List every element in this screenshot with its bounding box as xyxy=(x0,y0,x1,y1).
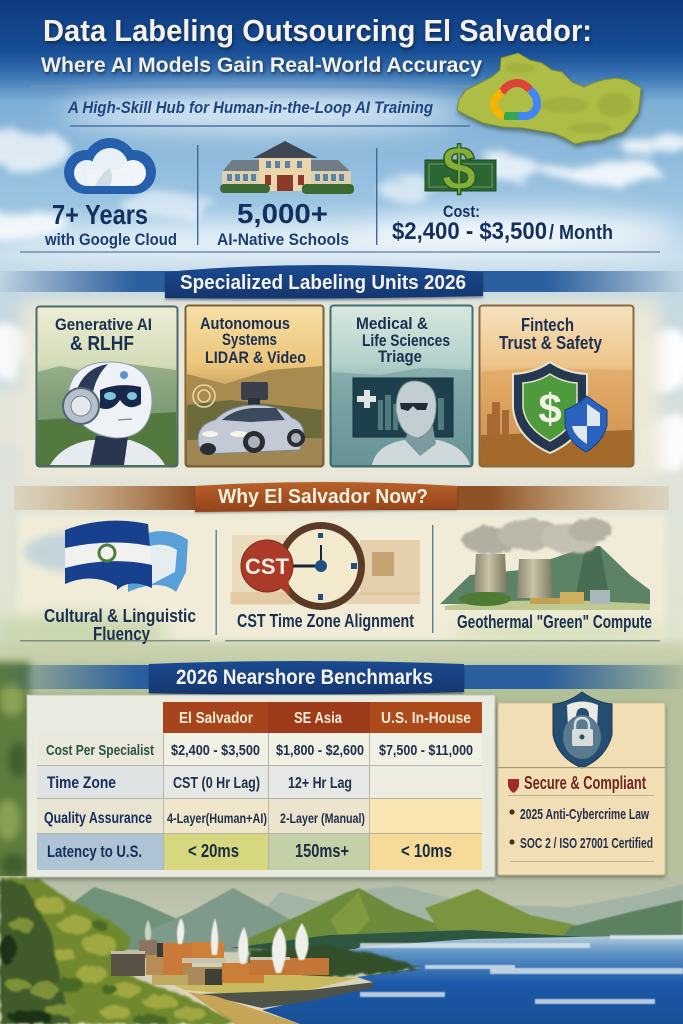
row: time zone: Time Zone xyxy=(47,773,116,792)
section banner: specialized labeling units xyxy=(0,265,683,299)
table header xyxy=(163,702,482,733)
divider xyxy=(197,145,198,245)
icon: lidar signal xyxy=(193,385,215,407)
icon: El Salvador flag xyxy=(65,521,188,592)
stat: AI-native schools xyxy=(217,141,354,249)
icon: plant and trees xyxy=(459,590,610,606)
divider xyxy=(216,530,217,635)
panel: benchmarks table xyxy=(27,695,495,877)
icon: medical screen xyxy=(353,378,453,437)
lower scene: mountains, lake, factory xyxy=(0,876,683,1024)
panel: Generative AI and RLHF xyxy=(36,306,178,466)
section banner: why El Salvador now: Why El Salvador Now? xyxy=(218,486,428,508)
row: quality assurance: 4-Layer(Human+AI) xyxy=(167,810,267,826)
stat: monthly cost xyxy=(392,135,613,245)
icon: dollar shield: $ xyxy=(538,385,562,432)
section banner: specialized labeling units: Specialized Labeling Units 2026 xyxy=(180,272,466,294)
icon: cooling towers xyxy=(474,554,553,598)
stat: monthly cost: $2,400 - $3,500 xyxy=(392,218,547,245)
title: Where AI Models Gain Real-World Accuracy xyxy=(41,54,482,77)
row: latency to U.S.: 150ms+ xyxy=(295,841,349,861)
row: latency to U.S.: < 10ms xyxy=(401,841,452,861)
row: quality assurance: Quality Assurance xyxy=(44,810,152,827)
panel: Fintech trust and safety xyxy=(480,306,634,466)
icon: dollar bill: $ xyxy=(442,135,476,204)
icon: small red shield xyxy=(508,779,519,793)
stat: monthly cost: / Month xyxy=(549,222,613,244)
icon: clock xyxy=(277,522,365,610)
row: cost per specialist: $7,500 - $11,000 xyxy=(379,742,473,759)
icon: Google Cloud logo xyxy=(494,83,537,116)
divider xyxy=(432,525,433,633)
icon: tan city blocks xyxy=(230,535,420,605)
grass terrace, cliff and dirt path xyxy=(152,975,357,994)
smoke plumes xyxy=(145,918,309,973)
map of El Salvador with Google Cloud logo xyxy=(457,53,641,144)
divider xyxy=(376,148,377,245)
row: cost per specialist: $2,400 - $3,500 xyxy=(171,742,260,759)
panel: Autonomous systems: Autonomous xyxy=(200,314,290,333)
row: time zone xyxy=(37,765,482,798)
factory buildings xyxy=(111,940,329,985)
rule under stats xyxy=(20,251,660,253)
item: CST time zone alignment: CST Time Zone Alignment xyxy=(237,611,414,631)
stat: Google Cloud years xyxy=(44,138,177,249)
panel: Autonomous systems: LIDAR & Video xyxy=(205,348,306,367)
icon: steam clouds xyxy=(462,518,612,554)
section banner: nearshore benchmarks: 2026 Nearshore Benchmarks xyxy=(176,666,433,689)
item: cultural and linguistic fluency: Cultural & Linguistic xyxy=(44,606,196,626)
title rule xyxy=(30,85,470,127)
stat: monthly cost: Cost: xyxy=(443,202,480,221)
item: cultural and linguistic fluency xyxy=(24,521,196,644)
row: quality assurance xyxy=(37,798,482,833)
stat: Google Cloud years: with Google Cloud xyxy=(44,230,177,249)
panel: Autonomous systems: Systems xyxy=(222,330,277,349)
panel: Autonomous systems xyxy=(186,306,324,466)
panel: secure and compliant xyxy=(498,692,665,875)
panel: Medical and life sciences: Life Sciences xyxy=(362,331,450,350)
stat: AI-native schools: 5,000+ xyxy=(237,198,328,229)
item: geothermal green compute xyxy=(440,518,652,632)
icon: blue shield xyxy=(565,396,607,452)
icon: specialist portrait xyxy=(372,381,470,465)
tagline: A High-Skill Hub for Human-in-the-Loop AI Training xyxy=(67,98,434,117)
distant mountains xyxy=(70,884,683,952)
lake xyxy=(262,935,683,1024)
table header: U.S. In-House xyxy=(381,710,471,727)
icon: dollar bill xyxy=(425,135,496,204)
table header: El Salvador xyxy=(179,710,253,727)
stat: Google Cloud years: 7+ Years xyxy=(52,199,148,230)
row: cost per specialist: Cost Per Specialist xyxy=(46,742,154,759)
panel: Medical and life sciences: Medical & xyxy=(356,314,428,333)
panel: Generative AI and RLHF: Generative AI xyxy=(55,315,152,334)
rules under why section xyxy=(20,640,660,642)
icon: cloud xyxy=(64,138,156,194)
title xyxy=(41,13,592,77)
item: cultural and linguistic fluency: Fluency xyxy=(93,624,150,644)
icon: dollar shield xyxy=(513,362,587,453)
panel: Fintech trust and safety: Trust & Safety xyxy=(499,333,602,353)
panel: Generative AI and RLHF: & RLHF xyxy=(70,333,134,355)
row: latency to U.S.: < 20ms xyxy=(188,841,239,861)
section banner: why El Salvador now xyxy=(14,482,669,512)
icon: school building xyxy=(220,141,354,194)
row: time zone: 12+ Hr Lag xyxy=(288,775,352,792)
icon: car with roof camera xyxy=(198,382,305,455)
icon: CST bubble: CST xyxy=(245,554,290,579)
panel: Medical and life sciences xyxy=(330,306,472,466)
item: CST time zone alignment xyxy=(230,522,420,631)
panel: Medical and life sciences: Triage xyxy=(378,347,422,366)
left foliage edge xyxy=(0,662,30,882)
row: time zone: CST (0 Hr Lag) xyxy=(173,775,260,792)
panel: Fintech trust and safety: Fintech xyxy=(521,315,574,335)
table header: SE Asia xyxy=(294,710,342,727)
stat: AI-native schools: AI-Native Schools xyxy=(217,230,349,249)
title: Data Labeling Outsourcing El Salvador: xyxy=(43,13,592,48)
row: cost per specialist: $1,800 - $2,600 xyxy=(276,742,364,759)
row: cost per specialist xyxy=(37,733,482,765)
row: latency to U.S. xyxy=(37,833,482,870)
icon: robot head xyxy=(50,362,165,465)
icon: padlock shield xyxy=(553,692,612,768)
icon: CST bubble xyxy=(241,540,293,596)
foliage on the left xyxy=(0,876,235,1024)
row: latency to U.S.: Latency to U.S. xyxy=(47,842,142,861)
dark shore trees xyxy=(250,945,420,980)
row: quality assurance: 2-Layer (Manual) xyxy=(280,810,365,826)
section banner: nearshore benchmarks xyxy=(0,661,683,695)
icon: volcano and land xyxy=(440,546,650,610)
